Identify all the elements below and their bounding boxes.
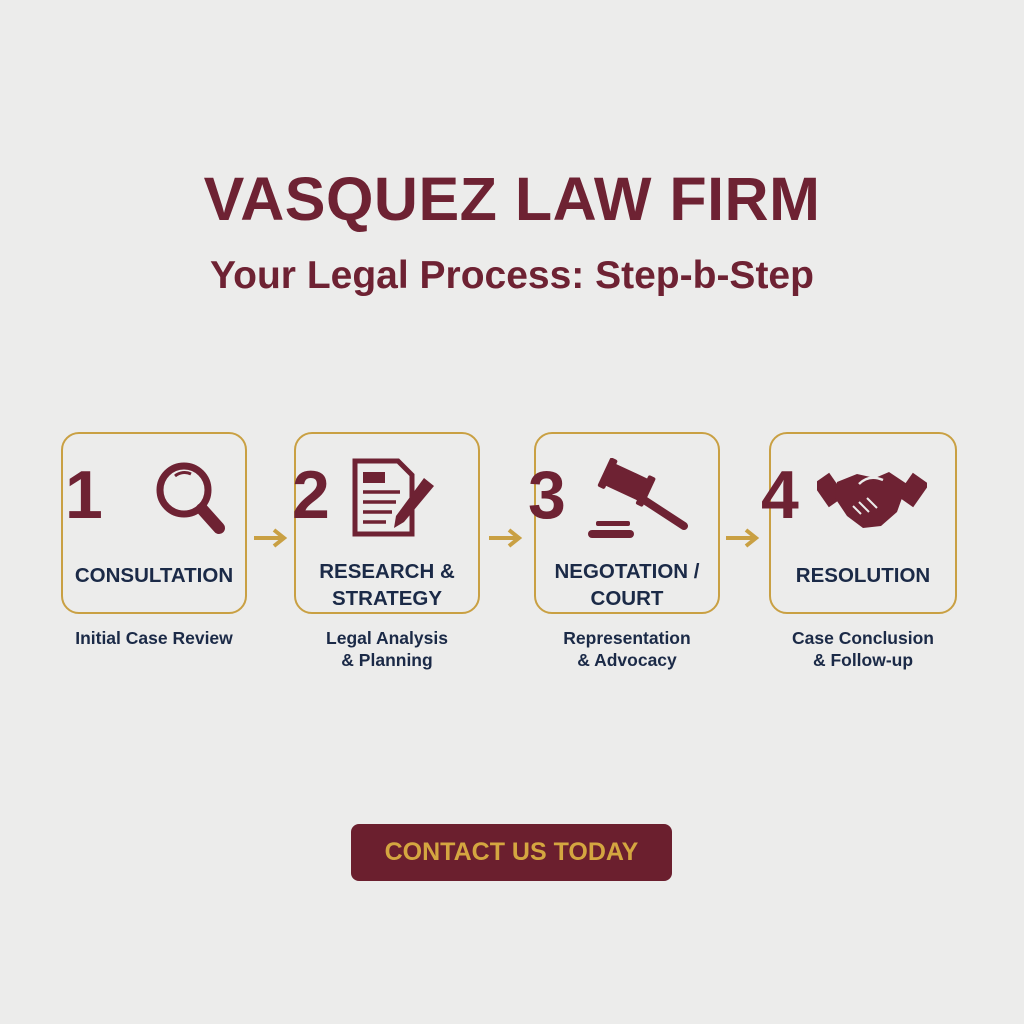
arrow 1 (254, 528, 288, 548)
panel: step 1 (61, 432, 247, 648)
description: & Planning (341, 650, 433, 670)
icon: document with pen (352, 458, 434, 536)
panel: step 3 (528, 432, 720, 670)
description (326, 628, 448, 670)
subtitle: Your Legal Process: Step-b-Step (210, 254, 814, 297)
number 4: 4 (761, 457, 799, 533)
panel: step 4 (761, 432, 957, 670)
number 3: 3 (528, 457, 566, 533)
label: RESEARCH & (319, 560, 455, 583)
description: Legal Analysis (326, 628, 448, 648)
panel: step 2 (292, 432, 480, 670)
button: contact (351, 824, 672, 881)
label: COURT (591, 587, 663, 610)
number 1: 1 (65, 457, 103, 533)
arrow 2 (489, 528, 522, 548)
label (319, 560, 455, 610)
label (554, 560, 700, 610)
icon: handshake (817, 472, 927, 528)
description: Initial Case Review (75, 628, 233, 648)
label: NEGOTATION / (554, 560, 700, 583)
number 2: 2 (292, 457, 330, 533)
label: STRATEGY (332, 587, 442, 610)
label: CONSULTATION (75, 564, 233, 587)
icon: gavel (588, 458, 688, 538)
title: VASQUEZ LAW FIRM (204, 165, 820, 233)
description (792, 628, 934, 670)
label: RESOLUTION (796, 564, 930, 587)
description: & Advocacy (577, 650, 677, 670)
description: Representation (563, 628, 691, 648)
arrow 3 (726, 528, 760, 548)
icon: magnifier (156, 462, 225, 534)
description (563, 628, 691, 670)
button: contact: CONTACT US TODAY (385, 838, 638, 866)
description: Case Conclusion (792, 628, 934, 648)
description: & Follow-up (813, 650, 913, 670)
